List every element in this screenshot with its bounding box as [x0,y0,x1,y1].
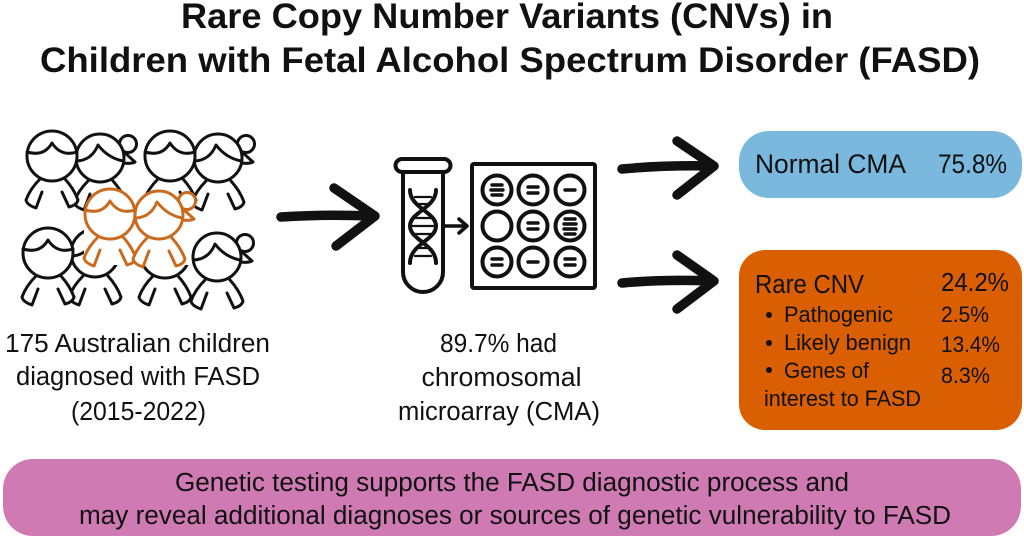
panel: rare CNV result: 8.3% [941,363,990,388]
panel: rare CNV result: Pathogenic [784,302,893,327]
panel: conclusion [3,459,1021,536]
title [40,0,980,80]
panel: normal CMA result [739,131,1022,198]
panel: rare CNV result: Rare CNV [755,271,864,299]
panel: rare CNV result: 2.5% [941,302,989,327]
arrow: cohort to testing [281,188,375,246]
panel: rare CNV result: 24.2% [941,269,1009,297]
icon: DNA helix [410,190,436,263]
title: Children with Fetal Alcohol Spectrum Disorder (FASD) [40,41,980,80]
text: CMA testing rate: chromosomal [422,364,582,392]
text: cohort description: 175 Australian children [5,330,270,358]
text: CMA testing rate: 89.7% had [440,330,557,358]
text: CMA testing rate [398,330,600,426]
icon: microarray plate [472,164,595,288]
panel: conclusion: Genetic testing supports the FASD diagnostic process and [175,469,849,497]
panel: rare CNV result: 13.4% [941,332,1000,357]
panel: normal CMA result: 75.8% [938,149,1007,179]
panel: rare CNV result: Likely benign [784,330,911,355]
icon: test tube with DNA [396,159,450,292]
panel: rare CNV result [739,250,1022,430]
arrow: to rare CNV [622,255,714,309]
icon: group of children with two highlighted in orange [22,131,254,309]
panel: normal CMA result: Normal CMA [755,149,906,179]
panel: conclusion: may reveal additional diagnoses or sources of genetic vulnerability to FASD [79,502,951,530]
text: cohort description: (2015-2022) [71,398,206,426]
text: CMA testing rate: microarray (CMA) [398,398,600,426]
text: cohort description: diagnosed with FASD [16,363,260,391]
icon: small arrow from tube to array [443,219,467,233]
panel: rare CNV result: interest to FASD [764,386,921,411]
text: cohort description [5,330,270,426]
arrow: to normal CMA [622,141,714,195]
panel: rare CNV result: Genes of [784,358,870,383]
